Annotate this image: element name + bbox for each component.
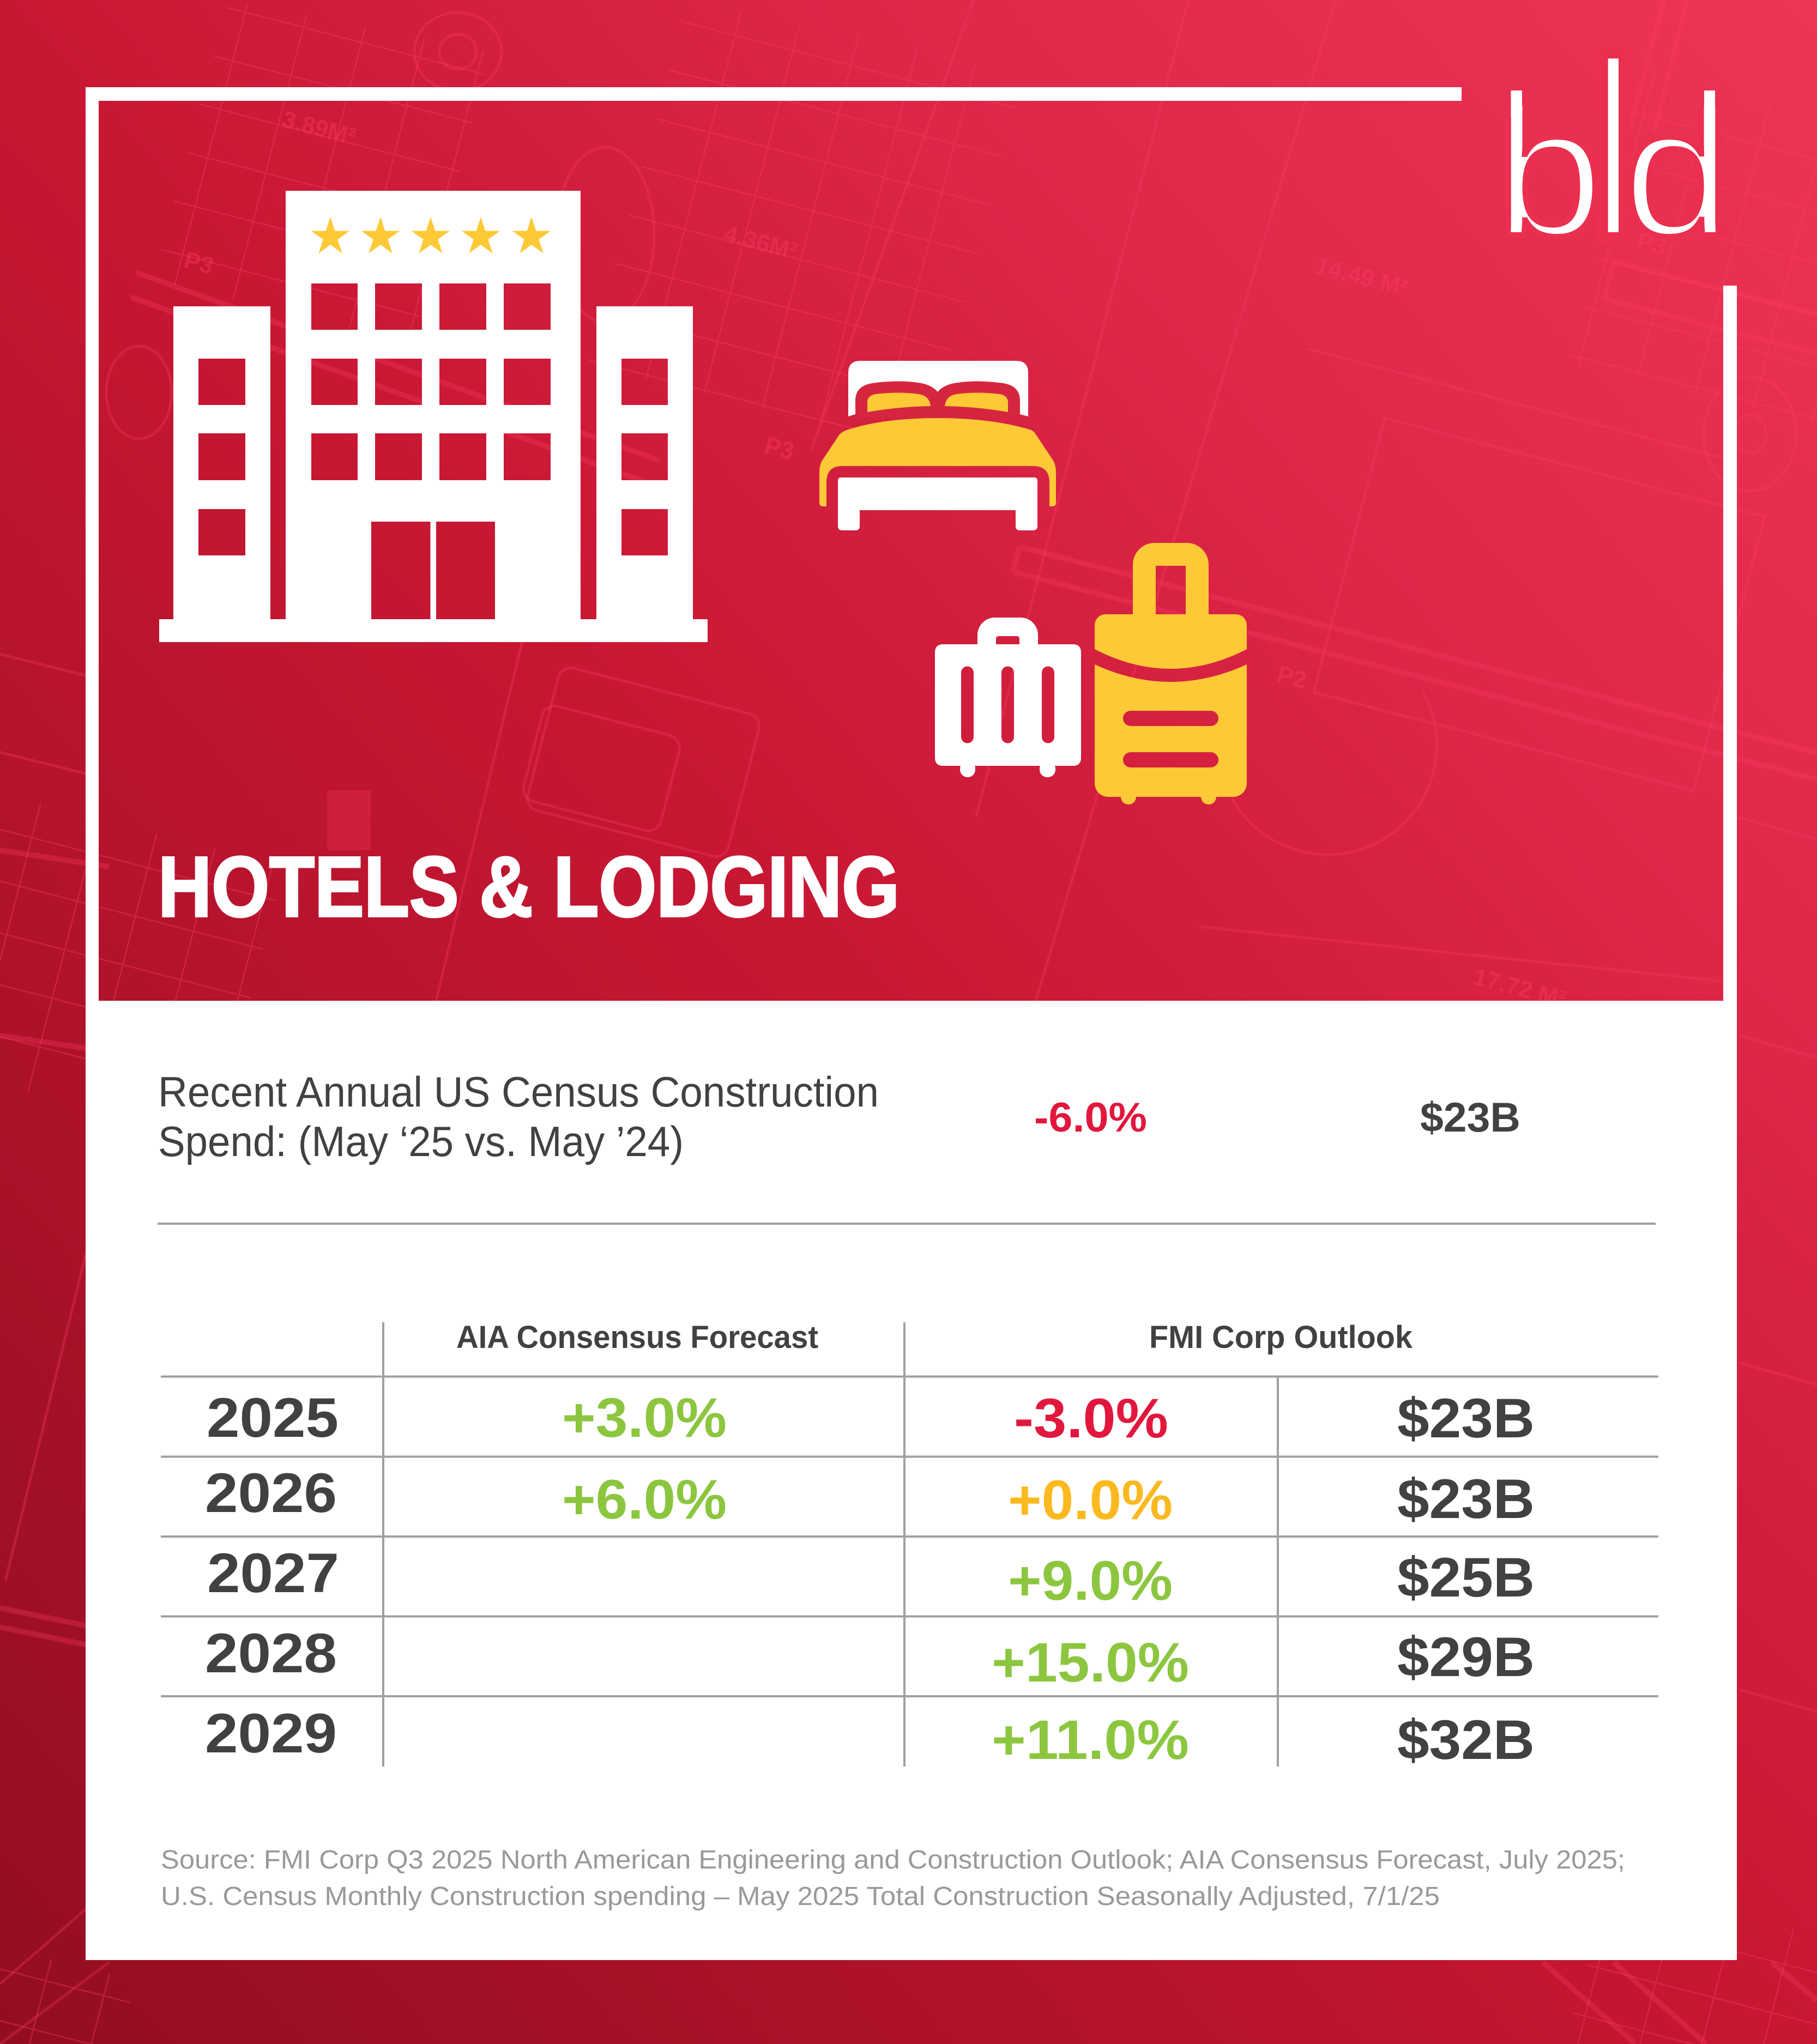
- frame: white rule top and left: [86, 87, 1462, 1003]
- text: 17.72 M²: [1470, 963, 1569, 1013]
- text: P3: [1634, 227, 1669, 261]
- building: right wing: [596, 306, 693, 621]
- row labels: years: 2027: [207, 1542, 339, 1604]
- FMI dollar values: $23B: [1397, 1468, 1535, 1530]
- FMI dollar values: $23B: [1397, 1387, 1535, 1449]
- logo: bld: d: [1623, 71, 1731, 274]
- text: P3: [762, 432, 797, 465]
- stat: census percent change: -6.0%: [1034, 1094, 1147, 1141]
- panel: white data panel: [86, 1001, 1737, 1960]
- logo: bld: l: [1585, 7, 1641, 293]
- building: center tower: [286, 191, 581, 621]
- building: left wing: [173, 306, 270, 621]
- text: 3.89M²: [279, 106, 358, 150]
- text: census spend label: Spend: (May ‘25 vs. May ’24): [158, 1117, 684, 1165]
- text: source note: Source: FMI Corp Q3 2025 North American Engineering and Construction Outlook; AIA Consensus Forecast, July 2025;: [161, 1846, 1625, 1874]
- row labels: years: 2025: [207, 1387, 339, 1449]
- FMI percent values: +0.0%: [1008, 1469, 1173, 1531]
- text: 4.36M²: [721, 220, 800, 265]
- FMI percent values: [992, 1387, 1189, 1771]
- table grid lines: [161, 1322, 1658, 1767]
- row labels: years: 2029: [205, 1702, 337, 1764]
- logo: bld: b: [1495, 71, 1603, 274]
- FMI percent values: +15.0%: [992, 1631, 1189, 1694]
- AIA values: +3.0%: [562, 1387, 727, 1449]
- icon: hotel building: [159, 191, 708, 642]
- icon: white suitcase: [935, 618, 1081, 777]
- frame: white rule right: [1723, 286, 1737, 1005]
- FMI dollar values: [1397, 1387, 1535, 1771]
- AIA values: +6.0%: [562, 1468, 727, 1531]
- logo: bld: [1495, 7, 1731, 293]
- column header: FMI: FMI Corp Outlook: [1149, 1320, 1413, 1355]
- AIA values: [562, 1387, 727, 1531]
- text: source note: [161, 1846, 1625, 1911]
- FMI dollar values: $25B: [1397, 1546, 1535, 1608]
- text: P2: [1274, 661, 1309, 694]
- text: source note: U.S. Census Monthly Construction spending – May 2025 Total Construction Seasonally Adjusted, 7/1/25: [161, 1882, 1440, 1911]
- stat: census dollar value: $23B: [1420, 1094, 1520, 1141]
- table: forecasts: [161, 1320, 1658, 1771]
- row labels: years: [205, 1387, 339, 1764]
- icon: yellow suitcase: [1095, 543, 1247, 805]
- FMI percent values: +9.0%: [1008, 1550, 1173, 1612]
- icon: bed: [819, 361, 1056, 530]
- stars: [311, 217, 551, 253]
- FMI dollar values: $32B: [1397, 1709, 1535, 1771]
- text: census spend label: Recent Annual US Census Construction: [158, 1068, 879, 1116]
- text: census spend label: [158, 1068, 879, 1165]
- building: base: [159, 619, 708, 642]
- FMI percent values: -3.0%: [1014, 1387, 1168, 1449]
- text: 14.49 M²: [1312, 252, 1411, 301]
- column header: AIA: AIA Consensus Forecast: [456, 1320, 818, 1355]
- FMI dollar values: $29B: [1397, 1626, 1535, 1688]
- title: HOTELS & LODGING: [158, 839, 900, 935]
- row labels: years: 2028: [205, 1622, 337, 1684]
- text: P3: [181, 246, 216, 280]
- row labels: years: 2026: [205, 1462, 337, 1524]
- FMI percent values: +11.0%: [992, 1709, 1189, 1771]
